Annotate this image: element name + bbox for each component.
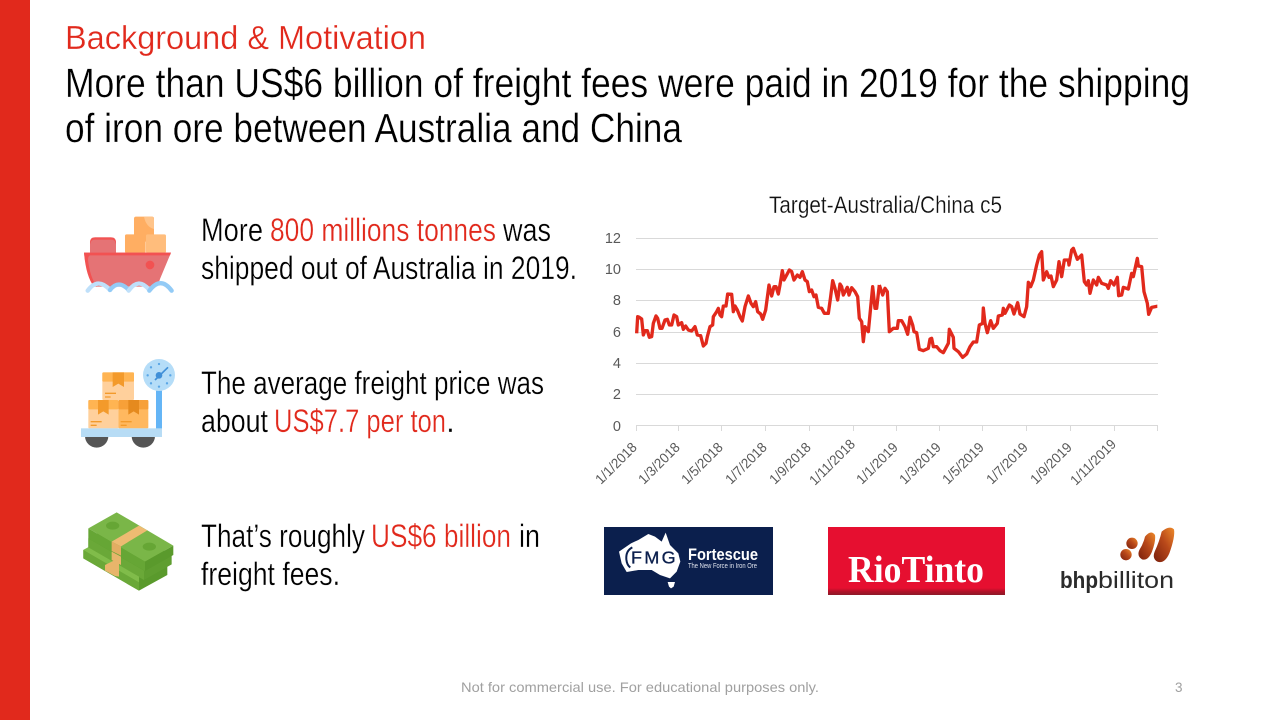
x axis labels — [592, 436, 1119, 488]
y axis labels — [605, 231, 621, 435]
text block: average freight price: The average freight price was — [201, 365, 544, 401]
text block: tonnes shipped: More — [201, 212, 263, 248]
section label: Background & Motivation — [65, 19, 426, 56]
x axis labels: 1/7/2019 — [983, 439, 1031, 487]
text block: average freight price — [201, 365, 544, 439]
x axis labels: 1/11/2019 — [1067, 436, 1119, 488]
x axis labels: 1/1/2019 — [853, 439, 901, 487]
data line 2019 — [879, 248, 1157, 357]
y axis labels: 10 — [605, 262, 621, 278]
text block: average freight price: . — [446, 403, 455, 439]
y axis labels: 0 — [613, 419, 621, 435]
y axis labels: 4 — [613, 356, 621, 372]
logo: BHP Billiton — [1060, 528, 1174, 593]
y axis labels: 8 — [613, 293, 621, 309]
y axis labels: 12 — [605, 231, 621, 247]
title: of iron ore between Australia and China — [65, 105, 682, 151]
text block: tonnes shipped — [201, 212, 577, 286]
text block: tonnes shipped: was — [502, 212, 551, 248]
x axis labels: 1/1/2018 — [592, 439, 640, 487]
x axis labels: 1/11/2018 — [806, 436, 858, 488]
footer note: Not for commercial use. For educational purposes only. — [461, 679, 819, 695]
logo: Fortescue: The New Force in Iron Ore — [688, 563, 757, 570]
x axis labels: 1/9/2018 — [766, 439, 814, 487]
x axis labels: 1/5/2019 — [939, 439, 987, 487]
text block: average freight price: about — [201, 403, 268, 439]
text block: freight fees total: That’s roughly — [201, 518, 365, 554]
line chart: Target-Australia/China c5 — [592, 192, 1158, 488]
text block: freight fees total: freight fees. — [201, 556, 340, 592]
red side bar — [0, 0, 30, 720]
y axis labels: 6 — [613, 325, 621, 341]
icon: cargo ship — [84, 217, 172, 291]
y axis labels: 2 — [613, 387, 621, 403]
text block: freight fees total: in — [519, 518, 540, 554]
logo: Fortescue: Fortescue — [688, 545, 758, 564]
x axis labels: 1/3/2019 — [896, 439, 944, 487]
x axis labels: 1/9/2019 — [1027, 439, 1075, 487]
icon: stack of banknotes — [83, 512, 173, 591]
text block: tonnes shipped: shipped out of Australia in 2019. — [201, 250, 577, 286]
logo: Rio Tinto: RioTinto — [848, 549, 984, 591]
text block: tonnes shipped: 800 millions tonnes — [270, 212, 496, 248]
data line 2018 — [637, 270, 879, 346]
title — [65, 60, 1190, 151]
text block: freight fees total: US$6 billion — [371, 518, 511, 554]
logo: BHP Billiton: bhp — [1060, 567, 1098, 593]
text block: average freight price: US$7.7 per ton — [274, 403, 446, 439]
x axis labels: 1/3/2018 — [635, 439, 683, 487]
x axis labels: 1/7/2018 — [722, 439, 770, 487]
logo: Fortescue: FMG — [631, 547, 676, 567]
logo: BHP Billiton: billiton — [1098, 567, 1174, 593]
logo: Fortescue — [604, 527, 773, 595]
page number: 3 — [1175, 680, 1183, 695]
icon: boxes on weighing scale — [81, 359, 175, 448]
logo: Rio Tinto — [828, 527, 1005, 595]
text block: freight fees total — [201, 518, 540, 592]
x axis labels: 1/5/2018 — [678, 439, 726, 487]
chart title: Target-Australia/China c5 — [769, 192, 1002, 219]
